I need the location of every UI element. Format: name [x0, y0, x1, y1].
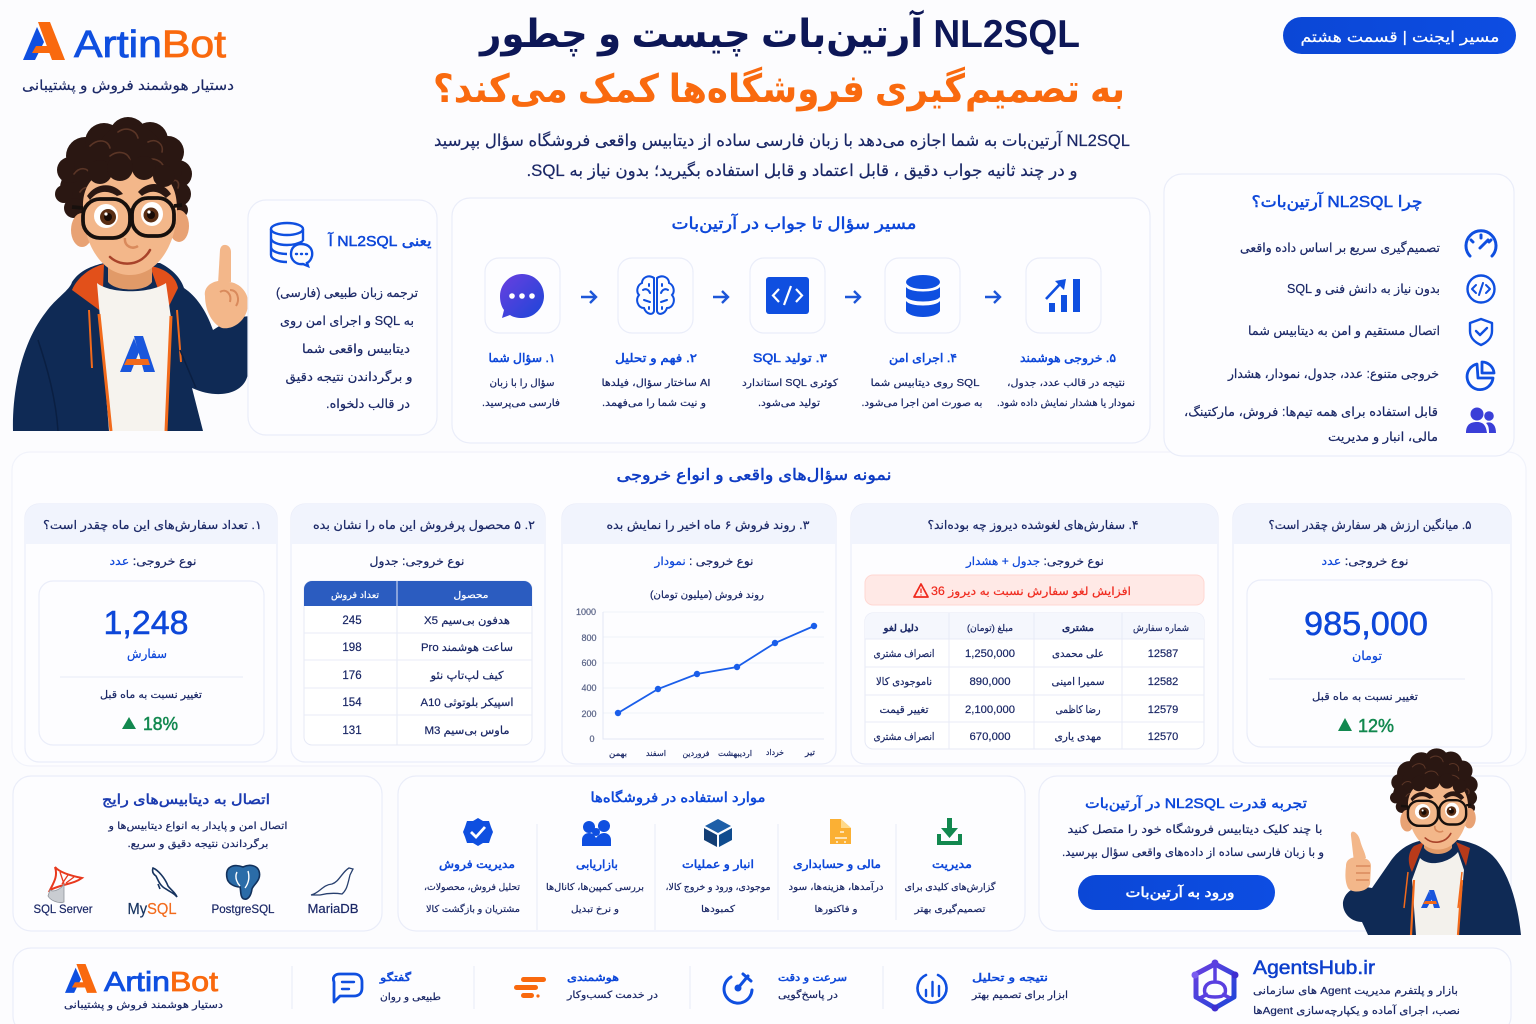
title [433, 9, 1125, 112]
thumbs up hand [1345, 832, 1371, 891]
arrow [713, 291, 728, 303]
intro text: NL2SQL آرتین‌بات به شما اجازه می‌دهد با زبان فارسی ساده از دیتابیس واقعی فروشگاه سؤال بپرسید [434, 131, 1130, 151]
table: ناموجودی کالا [876, 676, 932, 688]
table: 198 [342, 642, 362, 654]
icon: logo A [23, 22, 65, 60]
use: warehouse: موجودی، ورود و خروج کالا، [666, 882, 770, 893]
use: management: گزارش‌های کلیدی برای [904, 881, 996, 893]
description: در قالب دلخواه. [326, 397, 410, 412]
heading: نمونه سؤال‌های واقعی و انواع خروجی [616, 467, 892, 485]
card 5: average order value: ۵. میانگین ارزش هر سفارش چقدر است؟ [1268, 518, 1472, 533]
table: انصراف مشتری [874, 731, 934, 743]
step 2: understanding [602, 258, 710, 409]
table: 154 [342, 697, 362, 709]
icon: gauge [1466, 231, 1496, 256]
icon: database chat [271, 223, 312, 266]
table: 12587 [1148, 648, 1178, 660]
card 3: sales trend: نوع خروجی : نمودار [653, 556, 754, 569]
button: ورود به آرتین‌بات [1126, 884, 1234, 901]
AgentsHub: نصب، اجرای آماده و یکپارچه‌سازی Agentها [1253, 1004, 1460, 1017]
table: مبلغ (تومان) [967, 623, 1013, 634]
icon: shield check [1470, 319, 1492, 345]
table: 670,000 [970, 731, 1010, 743]
icon: code circle [1468, 276, 1494, 302]
logo mark [65, 964, 97, 993]
badge: series [1283, 17, 1516, 54]
logo: SQL Server [34, 867, 92, 916]
table: هدفون بی‌سیم X5 [424, 615, 510, 627]
step 1: your question [482, 258, 560, 409]
card 4: cancelled orders [851, 504, 1218, 764]
icon: database [906, 275, 940, 317]
heading: مسیر سؤال تا جواب در آرتین‌بات [672, 214, 916, 234]
description [276, 286, 419, 412]
panel: why NL2SQL [1164, 174, 1514, 456]
icon: brain [637, 276, 674, 314]
change indicator: 18% [143, 714, 178, 734]
use: sales management: تحلیل فروش، محصولات، [424, 882, 520, 893]
mascot: pointing boy [13, 117, 253, 431]
logo: MariaDB: MariaDB [308, 901, 358, 916]
item list: مالی، انبار و مدیریت [1328, 430, 1438, 445]
logo: SQL Server: SQL Server [34, 902, 92, 916]
card 1: orders count: ۱. تعداد سفارش‌های این ماه چقدر است؟ [43, 518, 262, 533]
title line 1: NL2SQL آرتین‌بات چیست و چطور [478, 9, 1080, 57]
step 2: understanding: و نیت شما را می‌فهمد. [602, 398, 706, 409]
card 1: orders count: تغییر نسبت به ماه قبل [100, 689, 202, 701]
arrow [845, 291, 860, 303]
table [304, 581, 532, 745]
panel: what is NL2SQL [248, 200, 437, 435]
arrow [581, 291, 596, 303]
logo wordmark: Artin Bot [74, 24, 226, 66]
item list: تصمیم‌گیری سریع بر اساس داده واقعی [1240, 240, 1441, 256]
table: اسپیکر بلوتوثی A10 [420, 697, 514, 709]
logo: PostgreSQL [212, 865, 275, 916]
step 4: safe run: به صورت امن اجرا می‌شود. [862, 398, 982, 409]
feature: speed: در پاسخ‌گویی [778, 989, 838, 1001]
shirt logo [120, 336, 155, 372]
use: warehouse: انبار و عملیات [682, 859, 754, 872]
arrow [985, 291, 1000, 303]
use: finance [788, 819, 884, 915]
icon: pie chart [1467, 362, 1494, 390]
title line 2: به تصمیم‌گیری فروشگاه‌ها کمک می‌کند؟ [433, 66, 1125, 112]
step 2: understanding: AI ساختار سؤال، فیلدها [602, 378, 710, 389]
description: و برگرداندن نتیجه دقیق [286, 369, 412, 385]
step 1: your question: سؤال را با زبان [490, 378, 554, 389]
hoodie [13, 263, 253, 431]
AgentsHub: بازار و پلتفرم مدیریت Agent های سازمانی [1253, 985, 1458, 997]
panel: question to answer path [452, 198, 1150, 443]
change indicator [122, 714, 178, 734]
icon: people [1466, 408, 1496, 433]
AgentsHub: AgentsHub.ir [1253, 958, 1376, 979]
card 1: orders count [25, 504, 277, 762]
table: محصول [454, 590, 488, 601]
card 2: top products: ۲. ۵ محصول پرفروش این ماه را نشان بده [313, 518, 535, 533]
panel: call to action: و با زبان فارسی ساده از داده‌های واقعی سؤال بپرسید. [1062, 847, 1324, 860]
step 1: your question: ۱. سؤال شما [489, 351, 556, 366]
use: sales management [424, 818, 520, 915]
footer [13, 948, 1511, 1024]
alert [865, 575, 1204, 605]
card 1: orders count: نوع خروجی: عدد [109, 556, 196, 569]
footer logo: دستیار هوشمند فروش و پشتیبانی [64, 1000, 223, 1011]
line chart: اردیبهشت [718, 749, 752, 758]
feature: analysis [918, 972, 1068, 1003]
item list: قابل استفاده برای همه تیم‌ها: فروش، مارکتینگ، [1184, 404, 1438, 420]
description: با چند کلیک دیتابیس فروشگاه خود را متصل کنید [1068, 822, 1322, 837]
line chart [576, 590, 824, 758]
feature: intelligence: هوشمندی [567, 972, 619, 984]
table: کیف لپ‌تاپ نئو [429, 670, 504, 682]
use: management: مدیریت [932, 859, 972, 872]
wordmark: Artin Bot [104, 966, 218, 997]
panel: call to action [1039, 776, 1511, 931]
table: 890,000 [970, 676, 1010, 688]
line chart: 200 [581, 709, 597, 719]
step 2: understanding: ۲. فهم و تحلیل [615, 351, 697, 366]
step 4: safe run: SQL روی دیتابیس شما [870, 378, 980, 389]
card 1: orders count: سفارش [127, 647, 167, 662]
button [1078, 875, 1275, 910]
item list: خروجی متنوع: عدد، جدول، نمودار، هشدار [1227, 367, 1439, 382]
step 3: generate SQL: تولید می‌شود. [758, 398, 820, 409]
table: رضا کاظمی [1056, 704, 1100, 716]
table: 131 [342, 725, 362, 737]
table: 245 [342, 615, 362, 627]
intro text: و در چند ثانیه جواب دقیق ، قابل اعتماد و قابل استفاده بگیرید؛ بدون نیاز به SQL. [526, 161, 1078, 181]
table: انصراف مشتری [874, 648, 934, 660]
table: مشتری [1062, 623, 1094, 634]
alert: افزایش لغو سفارش نسبت به دیروز 36 [931, 586, 1131, 599]
change indicator [1338, 716, 1394, 736]
table: علی محمدی [1052, 648, 1104, 660]
icon: invoice file [830, 819, 851, 844]
card 2: top products: نوع خروجی: جدول [370, 556, 464, 569]
icon: speed target [724, 974, 752, 1003]
step 3: generate SQL: کوئری SQL استاندارد [742, 378, 838, 389]
logo: MySQL [128, 868, 177, 918]
table [865, 613, 1204, 749]
line chart: روند فروش (میلیون تومان) [650, 590, 764, 601]
table: ساعت هوشمند Pro [421, 642, 513, 654]
line chart: 400 [581, 683, 597, 693]
heading: اتصال به دیتابیس‌های رایج [102, 792, 270, 808]
value: 1,248 [104, 604, 188, 641]
panel: databases: برگرداندن نتیجه دقیق و سریع. [128, 838, 268, 850]
table: سمیرا امینی [1052, 676, 1104, 688]
feature: conversation: گفتگو [379, 971, 411, 984]
heading: چرا NL2SQL آرتین‌بات؟ [1252, 192, 1422, 212]
logo: ArtinBot [22, 22, 234, 94]
heading: تجربه قدرت NL2SQL در آرتین‌بات [1085, 795, 1307, 812]
panel: store use cases [398, 776, 1025, 931]
feature: speed: سرعت و دقت [778, 972, 847, 984]
feature: analysis: نتیجه و تحلیل [972, 972, 1048, 984]
heading: یعنی NL2SQL آ [327, 232, 432, 250]
table: 176 [342, 670, 362, 682]
feature: analysis: ابزار برای تصمیم بهتر [971, 990, 1068, 1001]
icon: chat [333, 974, 362, 1002]
step 1: your question: فارسی می‌پرسید. [482, 398, 560, 409]
icon: AgentsHub hex [1192, 960, 1238, 1012]
use: marketing: و نرخ تبدیل [571, 904, 619, 915]
head [1390, 748, 1478, 849]
use: management [904, 818, 996, 915]
card 5: average order value: نوع خروجی: عدد [1322, 556, 1408, 569]
heading: موارد استفاده در فروشگاه‌ها [590, 789, 766, 806]
shirt logo [1421, 890, 1440, 908]
line chart: 1000 [576, 607, 596, 617]
card 2: top products [291, 504, 545, 762]
feature: speed [724, 972, 847, 1003]
hoodie [1343, 840, 1521, 935]
step 4: safe run: ۴. اجرای امن [889, 351, 957, 366]
line chart: 600 [581, 658, 597, 668]
step 5: smart output: نتیجه در قالب عدد، جدول، [1007, 378, 1125, 389]
use: marketing: بازاریابی [576, 859, 618, 872]
card 5: average order value [1233, 504, 1511, 763]
icon: bar chart [1046, 279, 1080, 312]
line chart: تیر [804, 748, 815, 757]
pointing hand [205, 245, 248, 328]
line chart: بهمن [609, 749, 627, 758]
use: marketing: بررسی کمپین‌ها، کانال‌ها [546, 882, 644, 893]
line chart: فروردین [682, 749, 710, 758]
step 3: generate SQL: ۳. تولید SQL [753, 351, 828, 366]
logo tagline: دستیار هوشمند فروش و پشتیبانی [22, 77, 234, 94]
description: به SQL و اجرای امن روی [280, 314, 414, 329]
use: warehouse [666, 819, 770, 915]
item list: اتصال مستقیم و امن به دیتابیس شما [1248, 324, 1440, 339]
intro text [434, 131, 1130, 181]
table: 1,250,000 [965, 648, 1015, 660]
icon: download report [937, 818, 962, 845]
badge: series: مسیر ایجنت | قسمت هشتم [1300, 29, 1500, 46]
feature: conversation: طبیعی و روان [380, 992, 441, 1003]
table: 12582 [1148, 676, 1178, 688]
use: warehouse: کمبودها [701, 904, 736, 915]
use: finance: و فاکتورها [814, 904, 858, 915]
table: ماوس بی‌سیم M3 [424, 725, 510, 737]
footer logo [64, 964, 223, 1011]
card 5: average order value: تغییر نسبت به ماه قبل [1312, 691, 1418, 703]
description: اتصال امن و پایدار به انواع دیتابیس‌ها و [107, 821, 288, 832]
icon: verified badge [463, 818, 493, 846]
logo: MariaDB [308, 868, 358, 916]
step 5: smart output: نمودار یا هشدار نمایش داده شود. [997, 398, 1135, 409]
logo: MySQL: MySQL [128, 901, 177, 918]
card 4: cancelled orders: نوع خروجی: جدول + هشدار [965, 556, 1104, 569]
line chart: اسفند [646, 749, 666, 758]
table: 2,100,000 [965, 704, 1015, 716]
table: دلیل لغو [882, 623, 918, 634]
card 4: cancelled orders: ۴. سفارش‌های لغوشده دیروز چه بوده‌اند؟ [928, 518, 1138, 533]
card 5: average order value: تومان [1352, 649, 1383, 664]
feature: intelligence: در خدمت کسب‌وکار [566, 990, 658, 1001]
table: 12570 [1148, 731, 1178, 743]
table: مهدی یاری [1054, 731, 1102, 743]
line chart: خرداد [766, 748, 784, 757]
head [55, 117, 192, 275]
icon: orange bars [514, 977, 546, 998]
item list [1184, 240, 1441, 445]
description: ترجمه زبان طبیعی (فارسی) [276, 286, 419, 301]
table: تعداد فروش [331, 590, 379, 601]
icon: chat bubble [500, 274, 544, 318]
item list: بدون نیاز به دانش فنی و SQL [1287, 282, 1440, 297]
use: finance: درآمدها، هزینه‌ها، سود [788, 880, 884, 893]
panel: sample questions [12, 452, 1526, 766]
icon: code [766, 277, 809, 314]
icon: chart circle [918, 975, 946, 1003]
icon: box [704, 819, 732, 847]
use: management: تصمیم‌گیری بهتر [913, 903, 986, 915]
mascot: thumbs up boy [1343, 748, 1521, 935]
change indicator: 12% [1358, 716, 1394, 736]
table: شماره سفارش [1133, 623, 1189, 634]
logo: PostgreSQL: PostgreSQL [212, 902, 275, 916]
step 3: generate SQL [742, 258, 838, 409]
use: sales management: مشتریان و بازگشت کالا [426, 903, 520, 915]
icon: team [582, 820, 611, 846]
step 4: safe run [862, 258, 982, 409]
panel: databases [13, 776, 382, 931]
card 3: sales trend: ۳. روند فروش ۶ ماه اخیر را نمایش بده [606, 518, 810, 533]
line chart: 0 [589, 734, 595, 744]
use: finance: مالی و حسابداری [793, 859, 881, 872]
value: 985,000 [1304, 605, 1428, 642]
step 5: smart output [997, 258, 1135, 409]
table: 12579 [1148, 704, 1178, 716]
AgentsHub [1192, 958, 1460, 1017]
use: marketing [546, 820, 644, 915]
description: دیتابیس واقعی شما [302, 342, 410, 357]
use: sales management: مدیریت فروش [439, 859, 515, 872]
feature: conversation [333, 971, 441, 1003]
card 3: sales trend [562, 504, 836, 764]
feature: intelligence [514, 972, 658, 1001]
line chart: 800 [581, 633, 597, 643]
table: تغییر قیمت [880, 704, 929, 716]
step 5: smart output: ۵. خروجی هوشمند [1020, 351, 1116, 366]
